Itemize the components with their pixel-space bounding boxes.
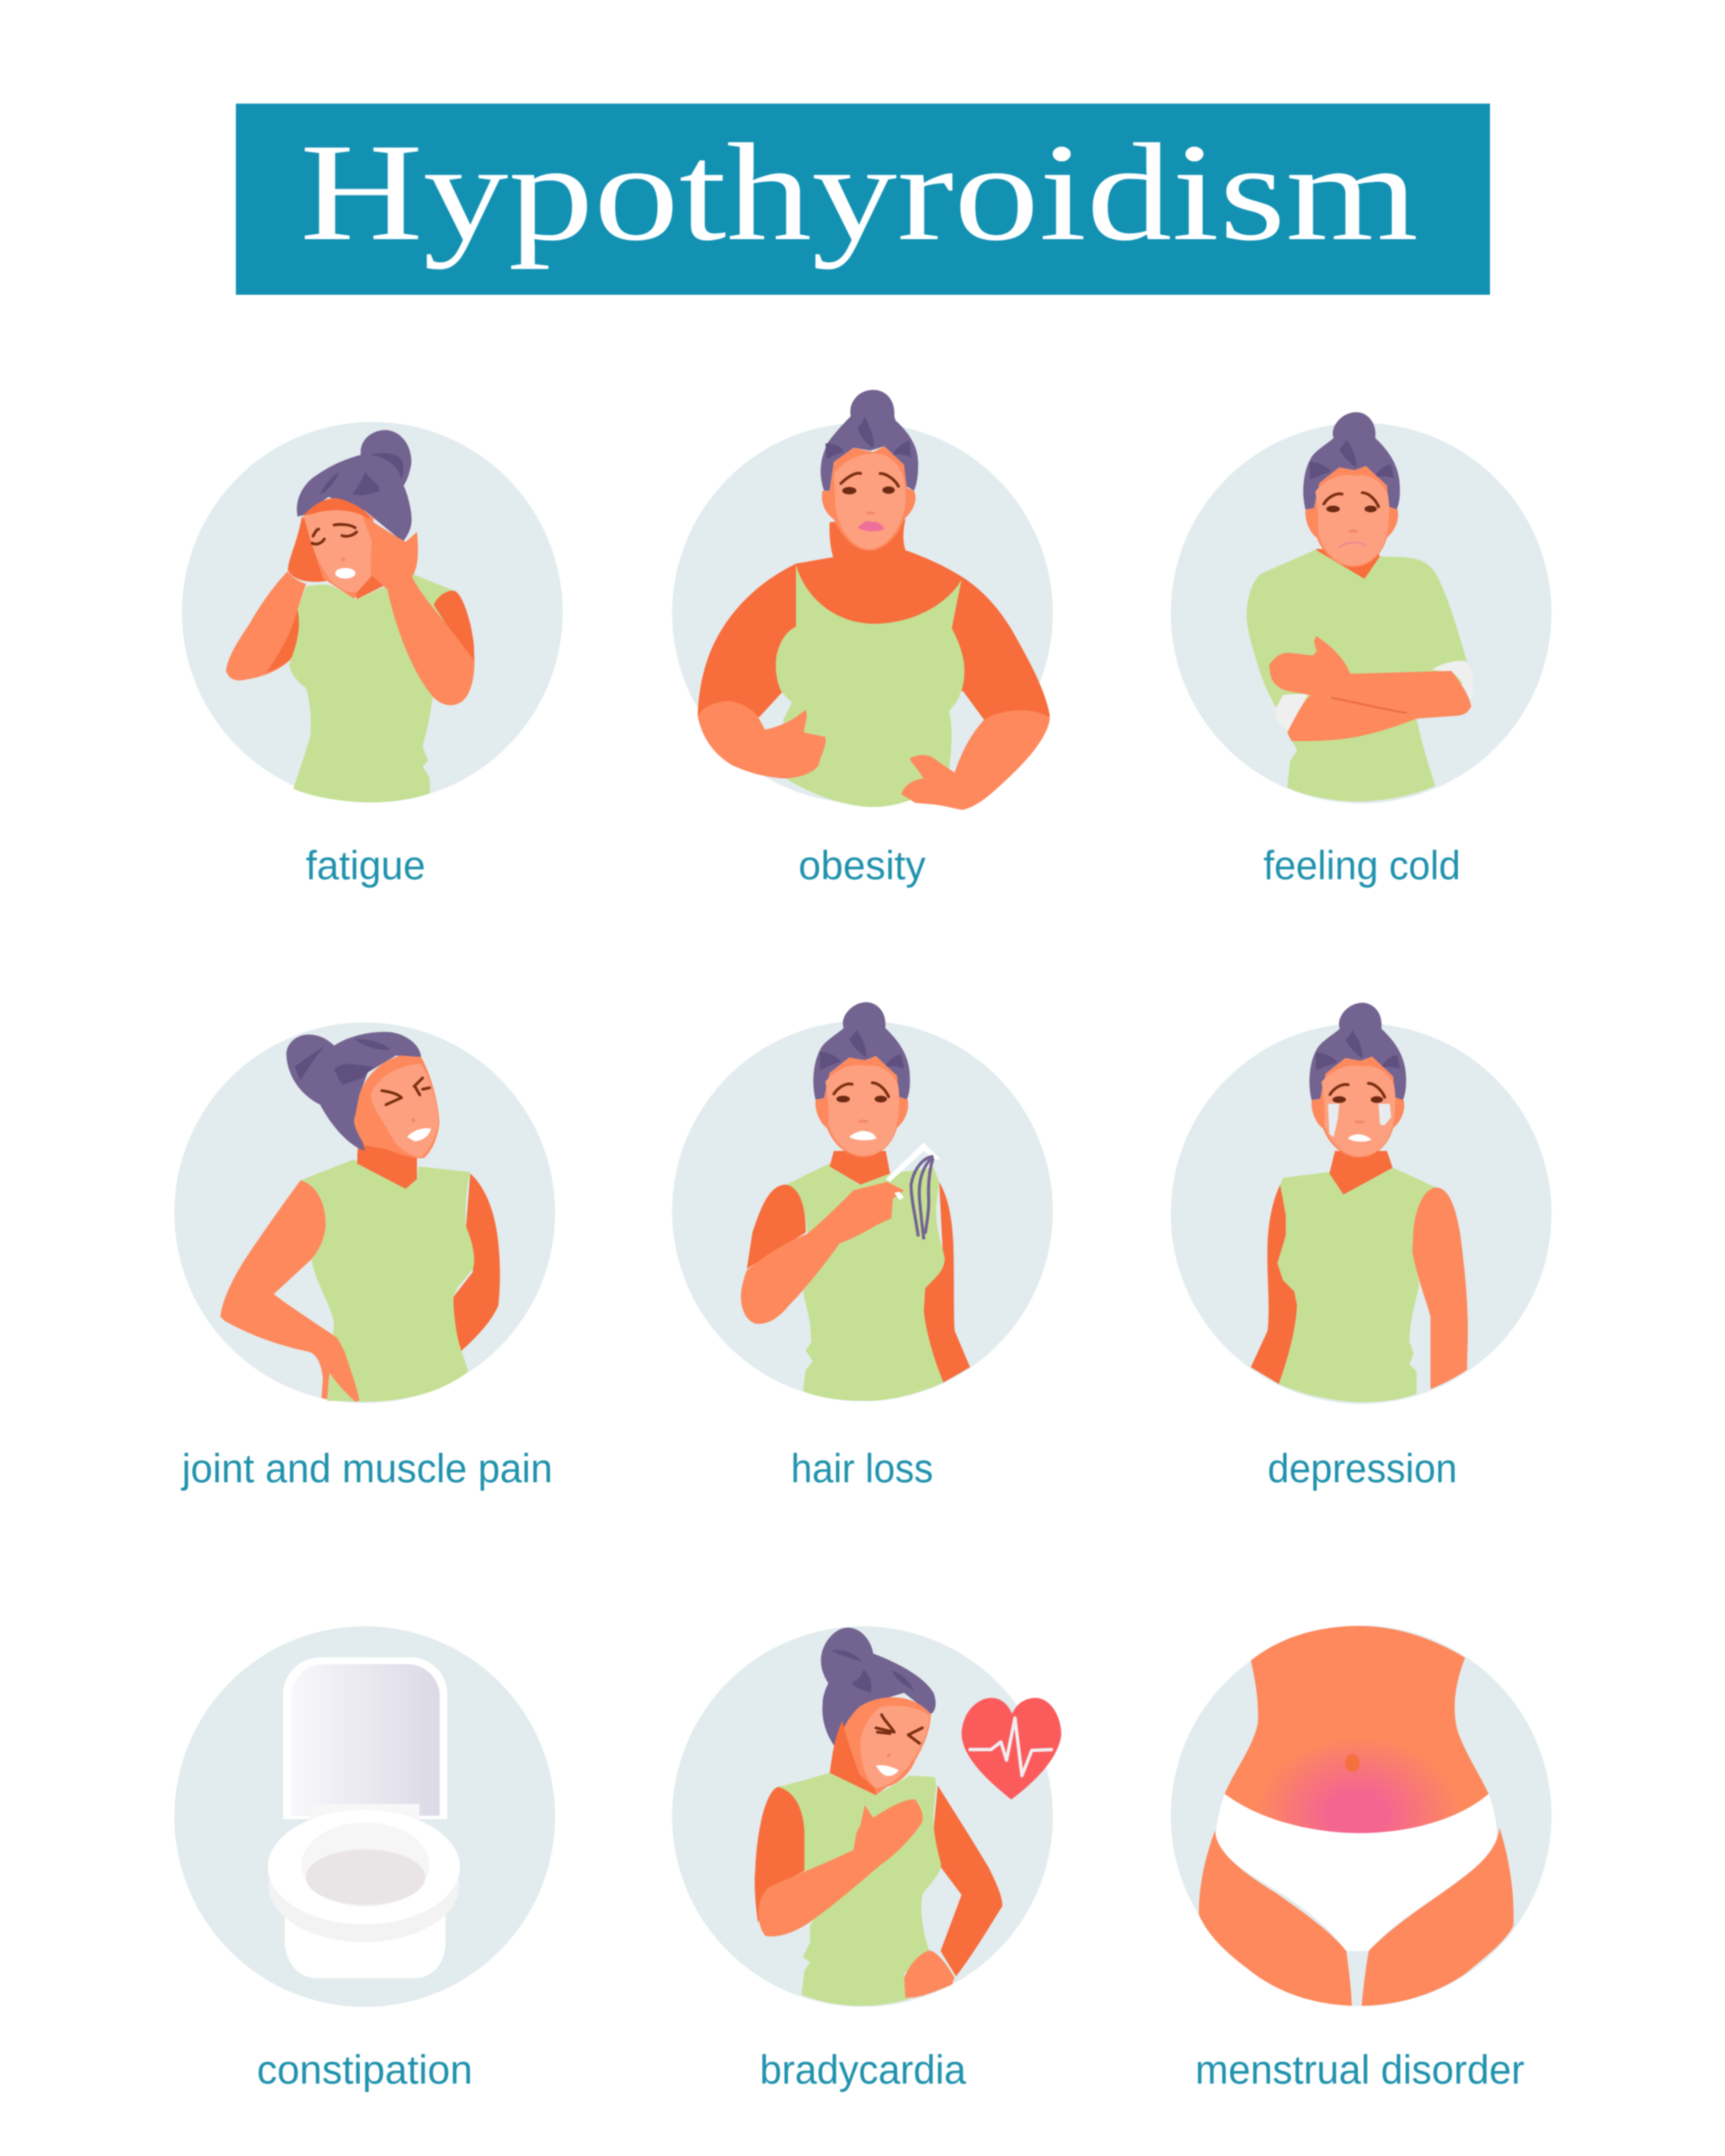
title: Hypothyroidism bbox=[300, 115, 1418, 270]
label: bradycardia: bradycardia bbox=[760, 2048, 966, 2093]
label: menstrual disorder: menstrual disorder bbox=[1195, 2048, 1525, 2093]
figure: woman clutching chest bbox=[755, 1628, 1061, 2006]
panel: feeling cold bbox=[1171, 412, 1551, 889]
label: constipation: constipation bbox=[257, 2048, 473, 2093]
panel: joint and muscle pain bbox=[174, 1022, 555, 1492]
panel: hair loss bbox=[672, 1002, 1053, 1492]
figure: woman with hand on hip bbox=[221, 1032, 500, 1401]
icon: toilet bbox=[268, 1657, 460, 1978]
icon: fallen hair strands bbox=[911, 1156, 932, 1238]
label: feeling cold: feeling cold bbox=[1263, 844, 1461, 889]
panel: depression bbox=[1171, 1003, 1551, 1492]
figure: torso with abdominal pain bbox=[1199, 1626, 1514, 2006]
figure: woman holding head bbox=[226, 430, 474, 803]
figure: woman with large body bbox=[697, 390, 1050, 810]
panel: constipation bbox=[174, 1626, 555, 2093]
panel: obesity bbox=[672, 390, 1053, 889]
panel: menstrual disorder bbox=[1171, 1625, 1551, 2093]
panel: bradycardia bbox=[672, 1626, 1061, 2093]
panel: fatigue bbox=[182, 422, 563, 889]
label: hair loss: hair loss bbox=[791, 1447, 933, 1492]
title banner bbox=[236, 104, 1490, 295]
label: joint and muscle pain: joint and muscle pain bbox=[180, 1447, 553, 1492]
figure: woman hugging herself bbox=[1247, 412, 1473, 802]
figure: woman crying bbox=[1251, 1003, 1468, 1402]
label: obesity: obesity bbox=[798, 844, 926, 889]
icon: heart with pulse bbox=[962, 1698, 1061, 1800]
figure: woman holding fallen hair bbox=[741, 1002, 970, 1401]
label: depression: depression bbox=[1268, 1447, 1457, 1492]
label: fatigue: fatigue bbox=[306, 844, 425, 889]
